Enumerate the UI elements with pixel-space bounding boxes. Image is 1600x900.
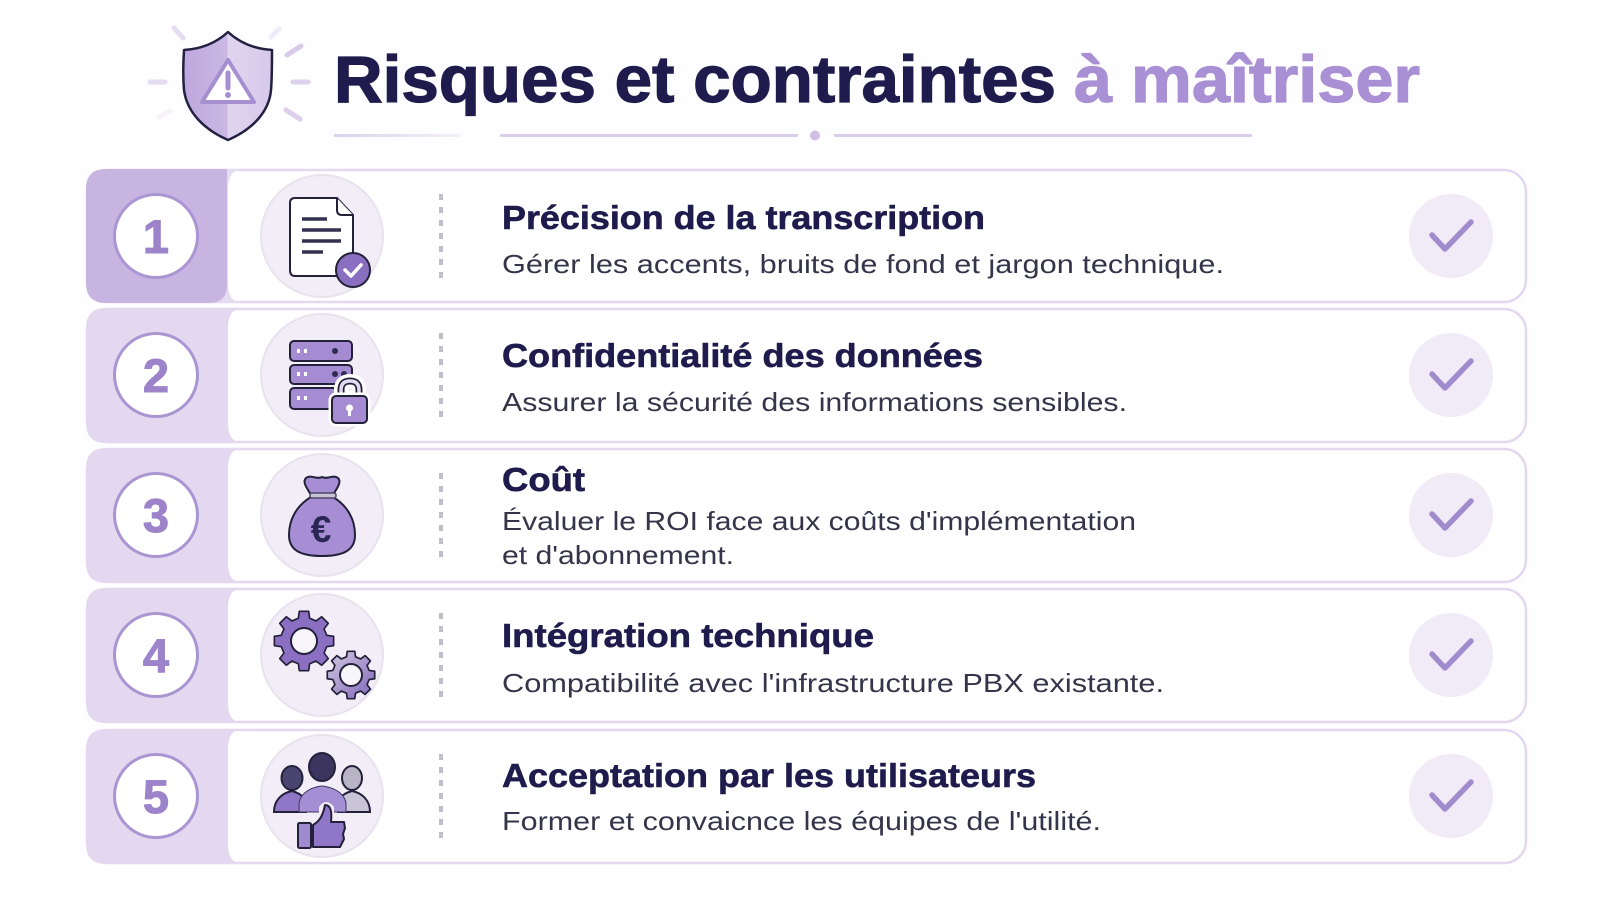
number badge 2: 2 [143, 349, 169, 402]
divider [439, 333, 443, 417]
row 3 text: Évaluer le ROI face aux coûts d'implémentation [502, 506, 1136, 536]
number badge 3: 3 [143, 489, 169, 542]
number badge 3 [114, 474, 198, 556]
title accent: à maîtriser [1074, 42, 1420, 116]
icon: money bag with euro [261, 454, 383, 576]
panel: row 2 [86, 308, 1526, 443]
check 2 [1409, 333, 1493, 417]
row 1 text: Précision de la transcription [502, 199, 985, 236]
icon: server with lock [261, 314, 383, 436]
number badge 4 [114, 614, 198, 696]
title underline [334, 130, 1252, 140]
check 1 [1409, 194, 1493, 278]
number badge 1 [114, 194, 198, 278]
panel: row 4 [86, 588, 1526, 723]
row 4 text [502, 617, 1164, 698]
check 5 [1409, 754, 1493, 838]
panel: row 5 [86, 729, 1526, 864]
row 2 text [502, 337, 1127, 417]
header icon: shield with warning [150, 28, 308, 140]
divider [439, 754, 443, 838]
number badge 5: 5 [143, 770, 169, 823]
divider [439, 473, 443, 557]
row 3 text: Coût [502, 461, 585, 498]
panel: row 3 [86, 448, 1526, 583]
row 3 text [502, 461, 1136, 570]
title: Risques et contraintes [334, 42, 1056, 116]
number badge 1: 1 [143, 210, 169, 263]
icon: money bag with euro: € [311, 509, 331, 550]
row 4 text: Intégration technique [502, 617, 874, 654]
divider [439, 613, 443, 697]
divider [439, 194, 443, 278]
row 5 text [502, 757, 1101, 836]
row 1 text: Gérer les accents, bruits de fond et jargon technique. [502, 249, 1224, 279]
row 3 text: et d'abonnement. [502, 540, 734, 570]
row 2 text: Assurer la sécurité des informations sensibles. [502, 387, 1127, 417]
row 5 text: Acceptation par les utilisateurs [502, 757, 1036, 794]
number badge 5 [114, 754, 198, 838]
icon: document with check [261, 175, 383, 297]
panel: row 1 [86, 169, 1526, 303]
row 2 text: Confidentialité des données [502, 337, 983, 374]
icon: users with thumbs up [261, 735, 383, 857]
number badge 4: 4 [143, 629, 169, 682]
check 3 [1409, 473, 1493, 557]
row 4 text: Compatibilité avec l'infrastructure PBX existante. [502, 668, 1164, 698]
icon: gears [261, 594, 383, 716]
number badge 2 [114, 334, 198, 416]
row 1 text [502, 199, 1224, 279]
check 4 [1409, 613, 1493, 697]
row 5 text: Former et convaicnce les équipes de l'utilité. [502, 806, 1101, 836]
